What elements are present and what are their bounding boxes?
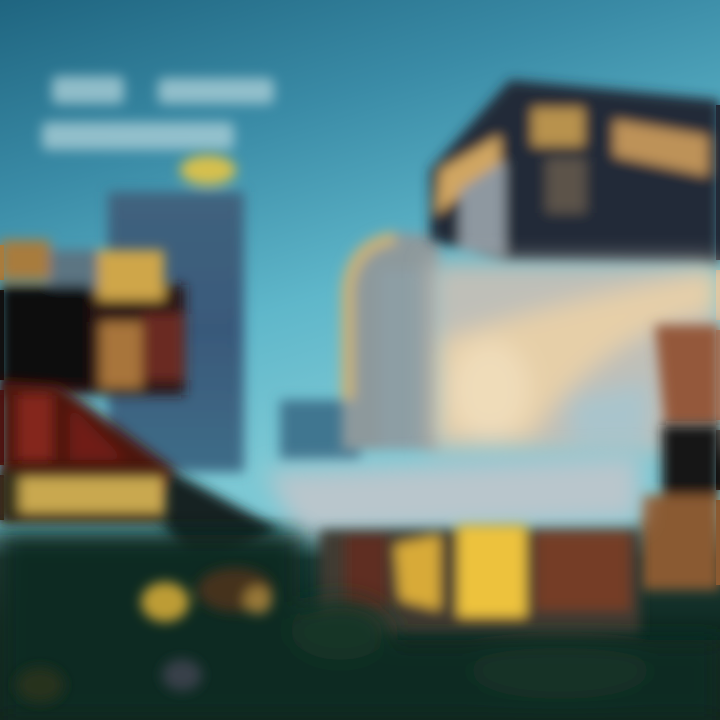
ground floor [320, 525, 640, 635]
right upper dark building [430, 80, 720, 265]
small distant building [280, 400, 360, 460]
white balcony band [265, 455, 640, 535]
small garden lights [16, 568, 273, 703]
right facade brown [655, 325, 720, 425]
left red roof [0, 380, 280, 570]
left lit window [0, 470, 165, 522]
tall curved building [342, 232, 440, 450]
right dark blocks [640, 425, 720, 590]
central tower [108, 155, 244, 472]
glowing facade [430, 262, 720, 452]
left dark building [0, 240, 185, 395]
blurred heading lines [42, 76, 274, 150]
foreground trees [0, 535, 720, 720]
